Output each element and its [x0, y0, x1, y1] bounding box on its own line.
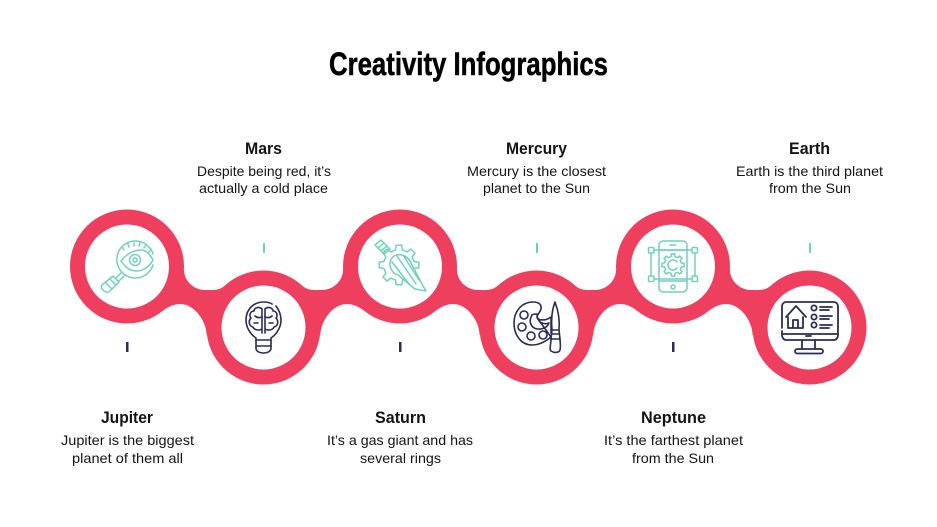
text block: Earth [736, 139, 883, 196]
text block: Jupiter [61, 408, 194, 466]
tick: Saturn [399, 342, 402, 352]
red winding ribbon [70, 210, 866, 384]
icon: magnifier with eye [101, 241, 153, 292]
tick: Earth [809, 243, 811, 253]
text block: Earth: from the Sun [769, 180, 851, 196]
icon: monitor with house [782, 302, 838, 354]
text block: Neptune: from the Sun [632, 450, 714, 466]
text block: Earth: Earth is the third planet [736, 163, 883, 179]
text block: Mercury [467, 139, 606, 196]
text block: Saturn [327, 408, 473, 466]
text block: Saturn: Saturn [375, 408, 426, 427]
text block: Mercury: planet to the Sun [483, 180, 590, 196]
icon: gear with pencil [375, 240, 426, 291]
text block: Saturn: several rings [360, 450, 441, 466]
text block: Mars: Despite being red, it’s [197, 163, 331, 179]
text block: Neptune [604, 408, 743, 466]
title: Creativity Infographics [329, 46, 608, 82]
icon: mobile app with gear [648, 241, 698, 292]
text block: Mars: actually a cold place [199, 180, 328, 196]
text block: Saturn: It’s a gas giant and has [327, 432, 473, 448]
text block: Mars [197, 139, 331, 196]
text block: Neptune: Neptune [641, 408, 706, 427]
icon: brain lightbulb [246, 302, 281, 353]
tick: Mercury [536, 243, 538, 253]
white circle centers [85, 224, 852, 370]
tick: Mars [263, 243, 265, 253]
icon: paint palette and brush [514, 302, 560, 352]
text block: Earth: Earth [789, 139, 830, 158]
tick: Neptune [672, 342, 674, 352]
tick: Jupiter [126, 342, 128, 352]
text block: Mercury: Mercury is the closest [467, 163, 606, 179]
text block: Neptune: It’s the farthest planet [604, 432, 743, 448]
text block: Jupiter: Jupiter [101, 408, 153, 427]
text block: Mercury: Mercury [506, 139, 568, 158]
text block: Jupiter: planet of them all [72, 450, 183, 466]
text block: Jupiter: Jupiter is the biggest [61, 432, 194, 448]
text block: Mars: Mars [245, 139, 282, 158]
